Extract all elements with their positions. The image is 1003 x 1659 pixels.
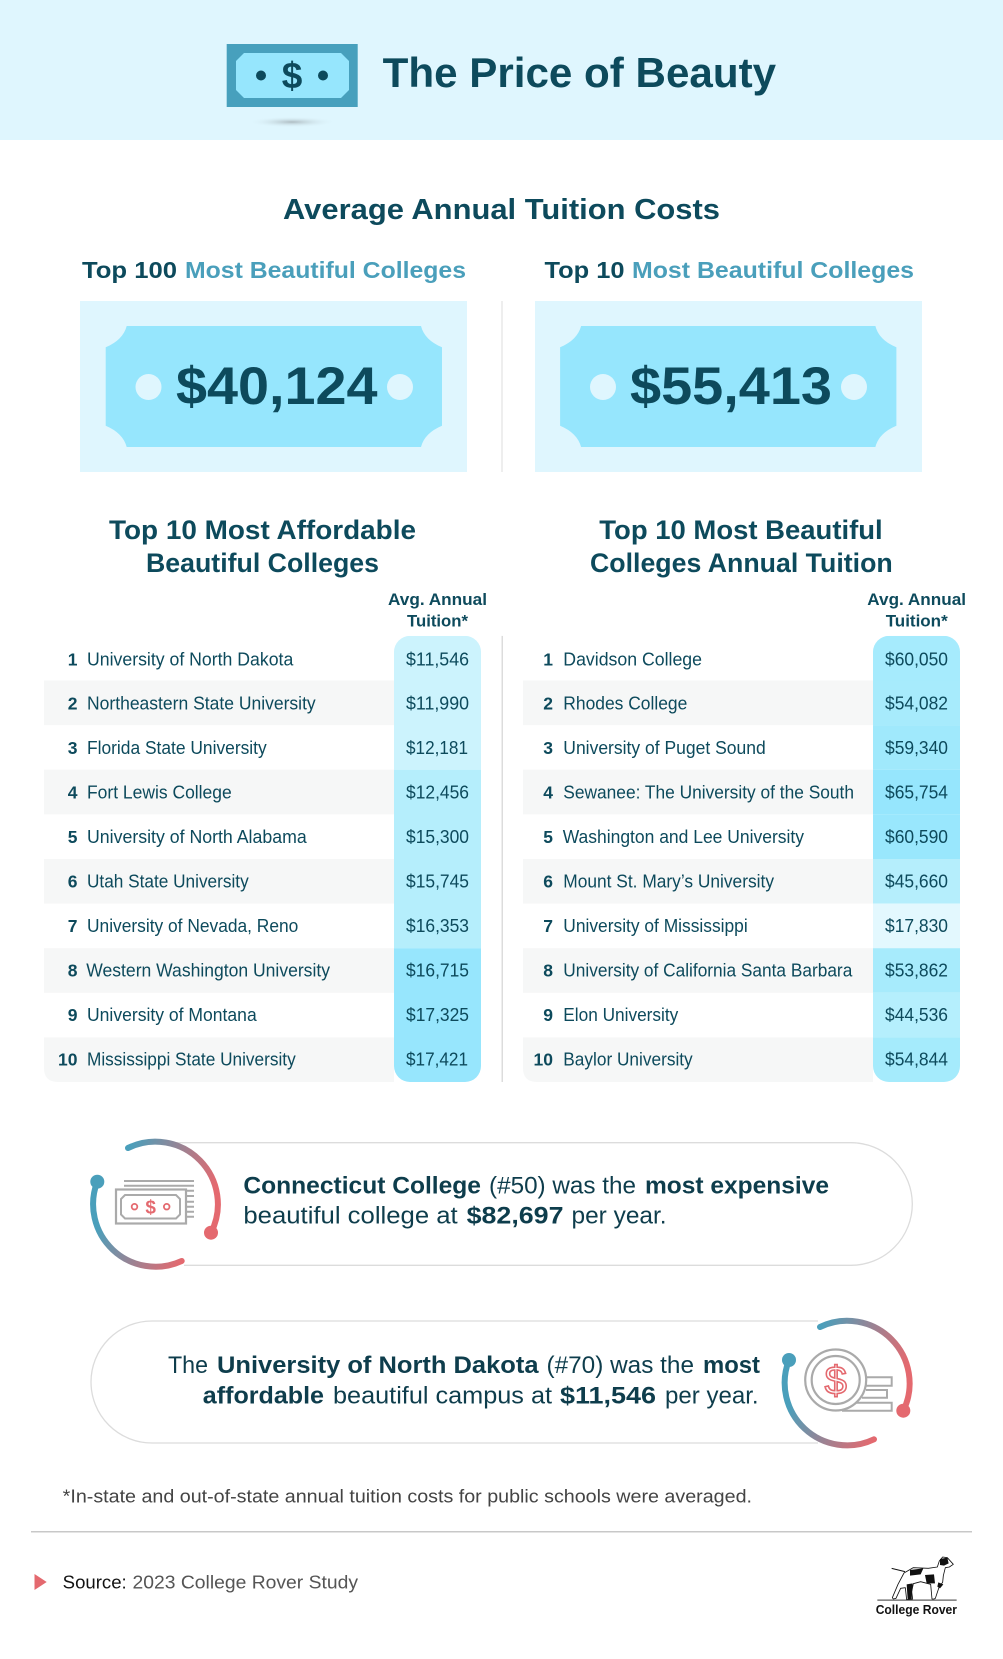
- row 1: 1: [543, 649, 553, 669]
- row 10: Baylor University: [563, 1049, 693, 1069]
- icon: arrow marker: [34, 1574, 47, 1590]
- callout text: (#50) was the: [489, 1172, 636, 1199]
- row 3: University of Puget Sound: [563, 738, 766, 758]
- icon: coin with ring: [782, 1321, 910, 1445]
- panel: top 100 average: [80, 257, 467, 472]
- row 6: Utah State University: [87, 872, 249, 892]
- row 7: $17,830: [885, 916, 948, 936]
- callout text: [243, 1172, 829, 1230]
- panel heading: top 10: Most Beautiful Colleges: [632, 257, 914, 283]
- row 5: $60,590: [885, 827, 948, 847]
- callout text: Connecticut College: [243, 1172, 481, 1199]
- callout text: The: [168, 1352, 208, 1379]
- row 6: 6: [68, 872, 78, 892]
- row 8: Western Washington University: [86, 960, 330, 980]
- row 7: $16,353: [406, 916, 469, 936]
- icon: stack of bills with ring: [90, 1142, 218, 1267]
- row 6: $15,745: [406, 872, 469, 892]
- row 3: 3: [68, 738, 78, 758]
- row 8: [68, 960, 469, 980]
- callout text: (#70) was the: [546, 1352, 694, 1379]
- row 6: Mount St. Mary’s University: [563, 872, 774, 892]
- row 4: [68, 783, 469, 803]
- row 8: University of California Santa Barbara: [563, 960, 853, 980]
- row 6: $45,660: [885, 872, 948, 892]
- callout text: beautiful college at: [243, 1203, 458, 1230]
- callout text: $82,697: [467, 1203, 564, 1230]
- row 7: University of Nevada, Reno: [87, 916, 298, 936]
- callout text: $11,546: [560, 1383, 656, 1410]
- panel heading: top 100: Most Beautiful Colleges: [185, 257, 466, 283]
- callout text: most expensive: [645, 1172, 829, 1199]
- row 2: Rhodes College: [563, 694, 687, 714]
- row 4: $65,754: [885, 783, 948, 803]
- row 1: University of North Dakota: [87, 649, 294, 669]
- row 1: [543, 649, 948, 669]
- row 2: 2: [543, 694, 553, 714]
- row 3: $12,181: [406, 738, 468, 758]
- section heading: average annual tuition costs: Average Annual Tuition Costs: [283, 194, 720, 226]
- row 8: $16,715: [406, 960, 469, 980]
- row 5: [68, 827, 469, 847]
- row 9: $44,536: [885, 1005, 948, 1025]
- ticket: $40,124: $40,124: [176, 357, 378, 416]
- icon: stack of bills with ring: $: [145, 1198, 156, 1218]
- row 4: $12,456: [406, 783, 469, 803]
- column heading: avg annual tuition: Avg. Annual: [388, 590, 487, 609]
- row 10: [534, 1049, 948, 1069]
- row 4: 4: [68, 783, 78, 803]
- row 10: [58, 1049, 468, 1069]
- row 9: Elon University: [563, 1005, 678, 1025]
- row 7: [68, 916, 469, 936]
- row 8: 8: [68, 960, 78, 980]
- row 9: $17,325: [406, 1005, 469, 1025]
- row 4: Sewanee: The University of the South: [563, 783, 854, 803]
- icon: dollar bill: $: [282, 55, 303, 96]
- row 3: [68, 738, 468, 758]
- row 4: 4: [543, 783, 553, 803]
- panel heading: top 100: Top 100: [82, 257, 177, 283]
- column heading: avg annual tuition: Tuition*: [886, 612, 948, 631]
- row 2: Northeastern State University: [87, 694, 316, 714]
- column heading: avg annual tuition: Tuition*: [407, 612, 468, 631]
- callout text: per year.: [665, 1383, 759, 1410]
- icon: dollar bill: [227, 44, 358, 128]
- row 2: [68, 694, 469, 714]
- row 3: Florida State University: [87, 738, 267, 758]
- row 6: [543, 872, 948, 892]
- row 4: Fort Lewis College: [87, 783, 232, 803]
- row 5: $15,300: [406, 827, 469, 847]
- row 2: [543, 694, 948, 714]
- callout: most affordable: [91, 1321, 910, 1445]
- panel heading: top 100: [82, 257, 466, 283]
- row 10: $17,421: [406, 1049, 468, 1069]
- row 1: 1: [68, 649, 78, 669]
- row 5: 5: [68, 827, 78, 847]
- row 7: 7: [543, 916, 553, 936]
- tuition column heat bar: [873, 636, 960, 1082]
- row 3: 3: [543, 738, 553, 758]
- row 9: 9: [68, 1005, 78, 1025]
- row 10: 10: [58, 1049, 78, 1069]
- callout text: [168, 1352, 760, 1410]
- callout: most expensive: [90, 1142, 912, 1267]
- callout text: affordable: [203, 1383, 324, 1410]
- icon: coin with ring: $: [825, 1359, 847, 1403]
- row 9: 9: [543, 1005, 553, 1025]
- row 7: 7: [68, 916, 78, 936]
- table heading: affordable: [109, 515, 416, 578]
- row 9: University of Montana: [87, 1005, 258, 1025]
- row 2: 2: [68, 694, 78, 714]
- row 2: $11,990: [406, 694, 469, 714]
- row 7: University of Mississippi: [563, 916, 748, 936]
- table: top 10 most affordable: [44, 515, 487, 1082]
- tuition column heat bar: [394, 636, 481, 1082]
- logo: College Rover: College Rover: [876, 1602, 957, 1617]
- row 8: 8: [543, 960, 553, 980]
- row 2: $54,082: [885, 694, 948, 714]
- table heading: beautiful: Top 10 Most Beautiful: [599, 515, 883, 545]
- column heading: avg annual tuition: [388, 590, 487, 631]
- header band: [0, 0, 1003, 140]
- callout text: beautiful campus at: [333, 1383, 552, 1410]
- table heading: affordable: Top 10 Most Affordable: [109, 515, 416, 545]
- icon: pointer dog: [877, 1557, 957, 1600]
- row 9: [68, 1005, 469, 1025]
- row 1: [68, 649, 469, 669]
- row 6: 6: [543, 872, 553, 892]
- row 1: $60,050: [885, 649, 948, 669]
- title: The Price of Beauty: [383, 49, 777, 96]
- row 9: [543, 1005, 948, 1025]
- row 8: $53,862: [885, 960, 948, 980]
- row 5: University of North Alabama: [87, 827, 308, 847]
- row 10: 10: [534, 1049, 553, 1069]
- row 7: [543, 916, 948, 936]
- ticket: $40,124: [106, 326, 442, 447]
- ticket: $55,413: $55,413: [630, 357, 832, 416]
- row 1: $11,546: [406, 649, 469, 669]
- row 10: $54,844: [885, 1049, 948, 1069]
- panel: top 10 average: [535, 257, 922, 472]
- row 3: $59,340: [885, 738, 948, 758]
- row 5: Washington and Lee University: [563, 827, 804, 847]
- panel heading: top 10: Top 10: [544, 257, 624, 283]
- source line: 2023 College Rover Study: [132, 1571, 359, 1592]
- table heading: affordable: Beautiful Colleges: [146, 548, 379, 578]
- callout text: University of North Dakota: [217, 1352, 539, 1379]
- row 1: Davidson College: [563, 649, 702, 669]
- source line: [34, 1571, 359, 1592]
- row 6: [68, 872, 469, 892]
- logo: College Rover: [876, 1557, 957, 1617]
- callout text: per year.: [572, 1203, 667, 1230]
- callout text: most: [703, 1352, 760, 1379]
- row 3: [543, 738, 948, 758]
- table: top 10 most beautiful: [523, 515, 966, 1082]
- row 5: [543, 827, 948, 847]
- row 5: 5: [543, 827, 553, 847]
- column heading: avg annual tuition: [867, 590, 966, 631]
- source line: Source:: [63, 1571, 127, 1592]
- column heading: avg annual tuition: Avg. Annual: [867, 590, 966, 609]
- ticket: $55,413: [560, 326, 896, 447]
- table heading: beautiful: [590, 515, 893, 578]
- footnote: *In-state and out-of-state annual tuition costs for public schools were averaged.: [63, 1486, 752, 1507]
- row 10: Mississippi State University: [87, 1049, 296, 1069]
- table heading: beautiful: Colleges Annual Tuition: [590, 548, 893, 578]
